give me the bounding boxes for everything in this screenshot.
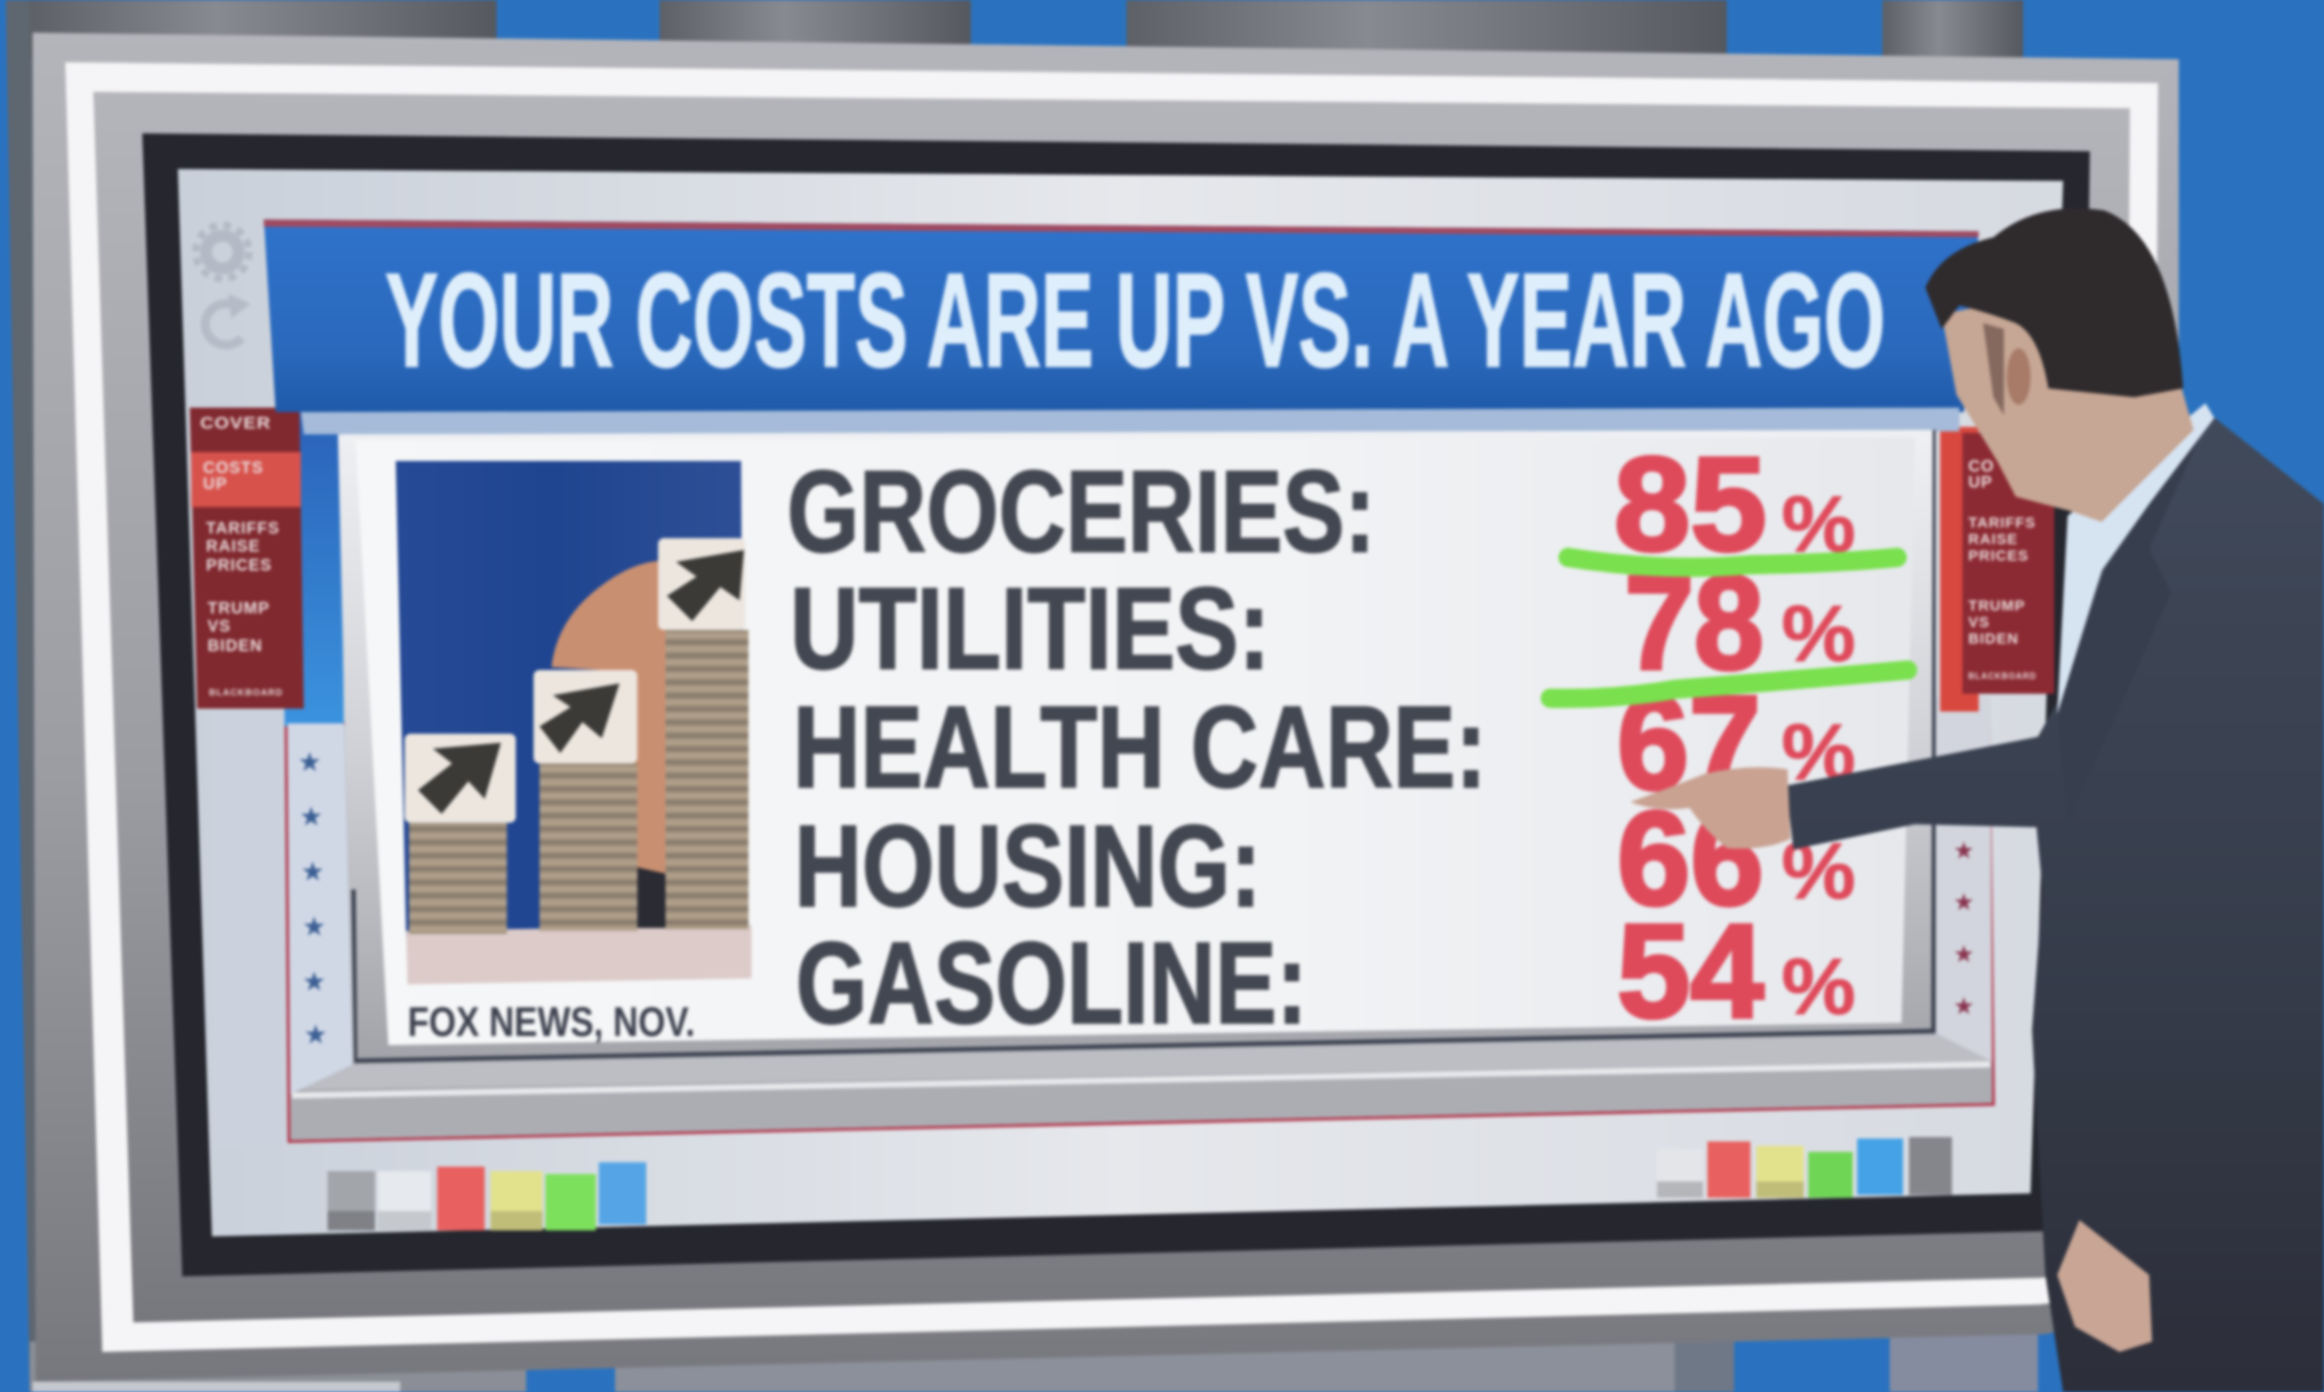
presenter pointing hand	[1630, 767, 1790, 849]
row: housing: HOUSING:	[794, 802, 1261, 931]
right tab: trump vs biden: VS	[1968, 615, 1990, 631]
left colour swatches	[328, 1162, 646, 1230]
stars right: ★	[1953, 838, 1974, 864]
lower stage band	[290, 1061, 1992, 1140]
value: 67 percent	[1617, 669, 1856, 818]
value: 85 percent	[1614, 430, 1856, 579]
right navigation tabs	[1940, 427, 2054, 712]
left navigation tabs	[190, 408, 304, 709]
arrow tiles	[405, 538, 746, 823]
tab: tariffs raise prices: TARIFFS	[206, 520, 280, 538]
stars left: ★	[298, 747, 322, 777]
tab: tariffs raise prices: PRICES	[206, 557, 272, 575]
stage highlight line	[292, 1061, 1991, 1098]
stars left: ★	[301, 857, 325, 887]
value: 78 percent	[1624, 549, 1856, 698]
value: 66 percent: 66	[1617, 784, 1764, 933]
content panel	[338, 430, 1936, 1064]
red-framed gray stage	[286, 723, 1993, 1141]
dark gap under hand	[637, 867, 670, 928]
presenter	[1630, 208, 2324, 1392]
stars left: ★	[304, 1020, 328, 1050]
arrows	[418, 550, 744, 814]
value: 66 percent	[1617, 784, 1856, 933]
value: 67 percent: 67	[1617, 669, 1761, 818]
stars right	[1953, 838, 1974, 1020]
blue backing behind panel	[282, 412, 344, 726]
monitor black edge	[142, 133, 2090, 1276]
left lower column	[212, 709, 289, 1149]
stars left: ★	[302, 966, 326, 996]
right tab: tariffs raise prices: PRICES	[1968, 548, 2029, 564]
row: health care: HEALTH CARE:	[793, 683, 1487, 812]
right tab: trump vs biden: BIDEN	[1968, 631, 2019, 647]
tab: trump vs biden: BIDEN	[208, 637, 263, 655]
value: 54 percent	[1617, 897, 1856, 1046]
source caption: FOX NEWS, NOV.	[408, 998, 695, 1045]
star strip left	[288, 723, 353, 1094]
icon: settings gear	[196, 225, 249, 279]
green telestrator marks	[1550, 557, 1908, 698]
monitor inner gray bezel	[93, 92, 2130, 1322]
stars left: ★	[302, 911, 326, 941]
tab: costs up: COSTS	[203, 459, 264, 477]
title banner	[264, 219, 1979, 434]
tab: cover: COVER	[200, 414, 271, 432]
tab: tariffs raise prices: RAISE	[206, 537, 260, 555]
hand behind coins	[551, 560, 667, 875]
stars right: ★	[1953, 994, 1974, 1020]
right tab: tariffs raise prices: TARIFFS	[1968, 516, 2036, 532]
presenter ear	[2007, 348, 2031, 405]
presenter hair	[1925, 208, 2183, 397]
right colour swatches	[1657, 1137, 1952, 1198]
right tab: tariffs raise prices: RAISE	[1968, 532, 2018, 548]
stars left: ★	[299, 802, 323, 832]
value: 66 percent: %	[1782, 826, 1856, 915]
value: 54 percent: 54	[1617, 897, 1764, 1046]
right tab: trump vs biden: TRUMP	[1968, 599, 2025, 615]
right tab: costs up: UP	[1968, 474, 1993, 492]
stars right: ★	[1953, 890, 1974, 916]
row: gasoline: GASOLINE:	[796, 919, 1307, 1048]
right tab: costs up: CO	[1968, 457, 1995, 475]
value: 67 percent: %	[1782, 708, 1856, 797]
right tab: blackboard: BLACKBOARD	[1968, 671, 2036, 681]
value: 78 percent: 78	[1624, 549, 1764, 698]
presenter suit	[1786, 415, 2324, 1392]
tab: trump vs biden: TRUMP	[208, 600, 270, 618]
icon: refresh arrow	[205, 294, 250, 345]
presenter face and neck	[1942, 304, 2194, 522]
presenter lapel shading	[2057, 418, 2208, 823]
stars right: ★	[1953, 942, 1974, 968]
value: 85 percent: %	[1782, 479, 1856, 568]
star strip right	[1936, 697, 1992, 1061]
row: utilities: UTILITIES:	[790, 565, 1270, 694]
value: 78 percent: %	[1782, 589, 1856, 678]
presenter shirt	[2057, 403, 2214, 715]
row: groceries: GROCERIES:	[787, 447, 1375, 576]
tab: costs up: UP	[203, 475, 227, 493]
stars left	[298, 747, 328, 1050]
tab: blackboard: BLACKBOARD	[209, 687, 283, 697]
touch screen	[178, 169, 2063, 1236]
value: 85 percent: 85	[1614, 430, 1767, 579]
coin stacks	[409, 630, 748, 934]
value: 54 percent: %	[1782, 942, 1856, 1031]
photo: coin stacks with arrows	[396, 461, 751, 984]
presenter lower hand	[2057, 1220, 2152, 1352]
tab: trump vs biden: VS	[208, 618, 231, 636]
presenter sideburn	[1983, 323, 2004, 415]
